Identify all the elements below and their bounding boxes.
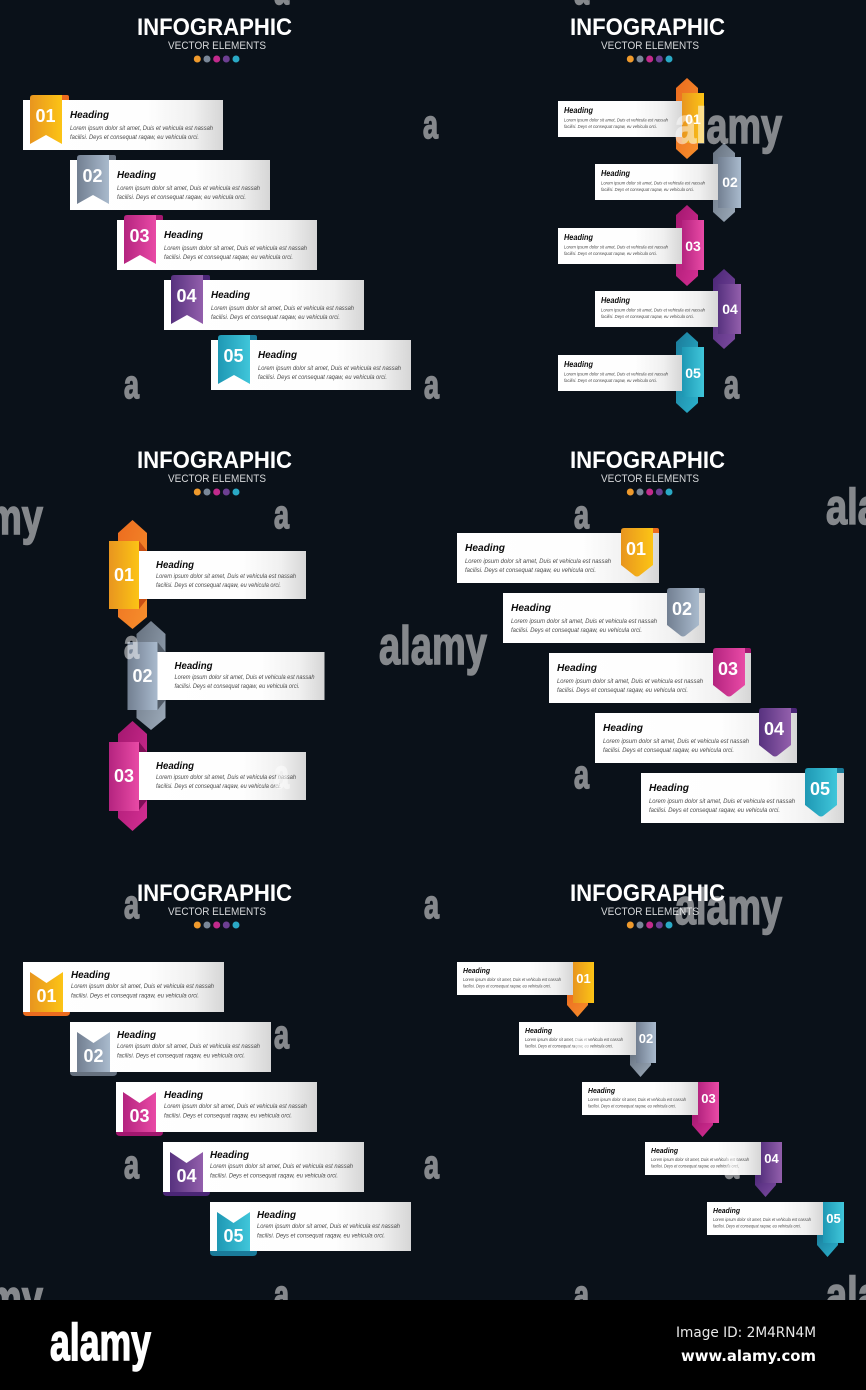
watermark layer: a xyxy=(574,1273,590,1317)
step 02 xyxy=(70,1022,271,1076)
step 05 xyxy=(210,1202,411,1256)
step 01 xyxy=(558,78,704,159)
watermark layer: a xyxy=(124,623,140,667)
title block xyxy=(570,447,725,496)
body text 02: facilisi. Deys et consequat raqaw, eu vehicula orci. xyxy=(117,1052,245,1060)
body text 03: facilisi. Deys et consequat raqaw, eu vehicula orci. xyxy=(557,687,688,694)
body text 01 xyxy=(156,573,297,589)
step 04 xyxy=(595,708,797,763)
panel: hexagon steps top right xyxy=(558,14,741,413)
heading 04: Heading xyxy=(603,722,644,734)
body text 03 xyxy=(557,678,704,694)
number 05: 05 xyxy=(826,1211,841,1226)
body text 04: Lorem ipsum dolor sit amet, Duis et vehicula est nassah xyxy=(601,308,705,312)
icon: banner 02 xyxy=(77,1032,110,1072)
body text 02: Lorem ipsum dolor sit amet, Duis et vehicula est nassah xyxy=(601,180,705,186)
step 02 xyxy=(128,621,324,730)
watermark layer: a xyxy=(274,1013,290,1057)
step 04 xyxy=(645,1142,782,1197)
watermark layer: a xyxy=(274,753,290,797)
icon: tag 02: 02 xyxy=(672,599,692,619)
body text 04 xyxy=(651,1157,749,1168)
step 05 xyxy=(211,335,411,390)
step 04 xyxy=(163,1142,364,1196)
step 01 xyxy=(109,520,306,629)
body text 05: facilisi. Deys et consequat raqaw, eu vehicula orci. xyxy=(713,1224,801,1228)
body text 01: Lorem ipsum dolor sit amet, Duis et vehicula est nassah xyxy=(70,125,214,132)
icon: tag 02 xyxy=(667,588,699,636)
watermark layer: a xyxy=(424,363,440,407)
body text 01: facilisi. Deys et consequat raqaw, eu vehicula orci. xyxy=(71,992,199,1000)
body text 02 xyxy=(117,1043,261,1060)
icon: ribbon 01: 01 xyxy=(35,106,56,126)
heading 04: Heading xyxy=(211,289,251,301)
heading 05: Heading xyxy=(257,1209,297,1221)
title block: INFOGRAPHIC xyxy=(570,880,725,907)
heading 02: Heading xyxy=(117,1029,157,1041)
step 03 xyxy=(116,1082,317,1136)
watermark layer: alamy xyxy=(379,616,487,676)
watermark layer: a xyxy=(274,1273,290,1317)
watermark layer: a xyxy=(574,493,590,537)
heading 01: Heading xyxy=(564,106,593,115)
body text 03 xyxy=(164,245,308,261)
website: www.alamy.com xyxy=(681,1347,816,1365)
body text 03: Lorem ipsum dolor sit amet, Duis et vehicula est nassah xyxy=(164,245,308,252)
body text 04: Lorem ipsum dolor sit amet, Duis et vehicula est nassah xyxy=(211,305,355,312)
icon: tag 03: 03 xyxy=(718,659,738,679)
heading 04: Heading xyxy=(651,1146,678,1155)
footer bar xyxy=(0,1300,866,1390)
icon: banner 05: 05 xyxy=(223,1226,244,1246)
panel: shield tag steps xyxy=(457,447,844,823)
body text 02 xyxy=(525,1037,623,1048)
step 01 xyxy=(457,528,659,583)
number 04: 04 xyxy=(722,301,738,317)
watermark layer: a xyxy=(423,103,439,147)
panel: down arrow steps xyxy=(457,880,844,1257)
body text 05 xyxy=(564,372,668,383)
body text 03 xyxy=(564,244,668,256)
step 05 xyxy=(641,768,844,823)
heading 03: Heading xyxy=(557,662,598,674)
icon: banner 03 xyxy=(123,1092,156,1132)
number 01: 01 xyxy=(685,111,701,127)
body text 02: facilisi. Deys et consequat raqaw, eu vehicula orci. xyxy=(174,683,300,690)
icon: ribbon 02: 02 xyxy=(82,166,103,186)
watermark layer: a xyxy=(124,1143,140,1187)
number 02: 02 xyxy=(722,174,738,190)
watermark layer: alamy xyxy=(675,98,782,154)
body text 05: facilisi. Deys et consequat raqaw, eu vehicula orci. xyxy=(257,1232,385,1240)
icon: tag 04 xyxy=(759,708,791,756)
watermark layer: a xyxy=(574,1013,590,1057)
icon: ribbon 03: 03 xyxy=(129,226,150,246)
step 03 xyxy=(582,1082,719,1137)
body text 05 xyxy=(258,365,402,381)
body text 04 xyxy=(601,308,705,319)
watermark layer: a xyxy=(724,363,740,407)
heading 02: Heading xyxy=(511,602,552,614)
step 02 xyxy=(70,155,270,210)
body text 01: facilisi. Deys et consequat raqaw, eu vehicula orci. xyxy=(156,582,281,589)
icon: banner 04 xyxy=(170,1152,203,1192)
icon: tag 03 xyxy=(713,648,745,696)
icon: tag 05: 05 xyxy=(810,779,830,799)
body text 02: facilisi. Deys et consequat raqaw, eu vehicula orci. xyxy=(525,1044,613,1048)
body text 01 xyxy=(463,977,561,988)
icon: ribbon 04 xyxy=(171,275,203,324)
body text 03: Lorem ipsum dolor sit amet, Duis et vehicula est nassah xyxy=(156,774,297,781)
title block: INFOGRAPHIC xyxy=(137,14,292,41)
step 03 xyxy=(117,215,317,270)
heading 05: Heading xyxy=(258,349,298,361)
title block xyxy=(137,447,292,496)
body text 01: facilisi. Deys et consequat raqaw, eu vehicula orci. xyxy=(463,984,551,988)
heading 01: Heading xyxy=(465,542,506,554)
body text 03: facilisi. Deys et consequat raqaw, eu vehicula orci. xyxy=(164,1112,292,1120)
body text 03: Lorem ipsum dolor sit amet, Duis et vehicula est nassah xyxy=(588,1097,686,1102)
heading 03: Heading xyxy=(164,229,204,241)
panel: three large hexagon steps xyxy=(109,447,324,831)
heading 01: Heading xyxy=(71,969,111,981)
watermark layer: a xyxy=(724,1143,740,1187)
title block: INFOGRAPHIC xyxy=(137,880,292,907)
body text 01 xyxy=(465,558,612,574)
body text 04: Lorem ipsum dolor sit amet, Duis et vehicula est nassah xyxy=(603,738,750,745)
title block xyxy=(570,880,725,928)
number 03: 03 xyxy=(701,1091,716,1106)
body text 02: Lorem ipsum dolor sit amet, Duis et vehicula est nassah xyxy=(117,185,261,192)
icon: tag 01 xyxy=(621,528,653,576)
title block: VECTOR ELEMENTS xyxy=(601,473,699,485)
body text 04: facilisi. Deys et consequat raqaw, eu vehicula orci. xyxy=(603,747,734,754)
number 02: 02 xyxy=(639,1031,653,1046)
heading 01: Heading xyxy=(156,559,195,571)
body text 04: facilisi. Deys et consequat raqaw, eu vehicula orci. xyxy=(601,314,694,319)
body text 02 xyxy=(117,185,261,201)
body text 01 xyxy=(70,125,214,141)
icon: banner 01: 01 xyxy=(36,986,57,1006)
body text 03: facilisi. Deys et consequat raqaw, eu vehicula orci. xyxy=(588,1104,676,1108)
body text 01 xyxy=(564,118,668,129)
heading 02: Heading xyxy=(601,169,630,178)
body text 02: Lorem ipsum dolor sit amet, Duis et vehicula est nassah xyxy=(117,1043,261,1050)
title block xyxy=(137,880,292,928)
icon: ribbon 01 xyxy=(30,95,62,144)
icon: ribbon 03 xyxy=(124,215,156,264)
body text 01: Lorem ipsum dolor sit amet, Duis et vehicula est nassah xyxy=(463,977,561,982)
number 01: 01 xyxy=(114,565,134,585)
body text 02 xyxy=(174,674,315,690)
body text 01 xyxy=(71,983,215,1000)
body text 05: Lorem ipsum dolor sit amet, Duis et vehicula est nassah xyxy=(713,1217,811,1222)
body text 05 xyxy=(713,1217,811,1228)
watermark layer: a xyxy=(424,883,440,927)
step 01 xyxy=(23,95,223,150)
heading 04: Heading xyxy=(601,296,630,305)
heading 01: Heading xyxy=(70,109,110,121)
body text 02 xyxy=(511,618,658,634)
heading 02: Heading xyxy=(174,660,213,672)
number 01: 01 xyxy=(576,971,591,986)
body text 01: Lorem ipsum dolor sit amet, Duis et vehicula est nassah xyxy=(71,983,215,990)
title block xyxy=(570,14,725,62)
step 03 xyxy=(558,205,704,286)
title block: VECTOR ELEMENTS xyxy=(601,40,699,52)
step 05 xyxy=(558,332,704,413)
body text 04: facilisi. Deys et consequat raqaw, eu vehicula orci. xyxy=(210,1172,338,1180)
heading 05: Heading xyxy=(649,782,690,794)
body text 01: facilisi. Deys et consequat raqaw, eu vehicula orci. xyxy=(70,134,199,141)
body text 01: facilisi. Deys et consequat raqaw, eu vehicula orci. xyxy=(465,567,596,574)
body text 03: facilisi. Deys et consequat raqaw, eu vehicula orci. xyxy=(156,783,281,790)
icon: ribbon 04: 04 xyxy=(176,286,197,306)
watermark layer: a xyxy=(574,753,590,797)
panel: ribbon steps top left xyxy=(23,14,411,390)
title block xyxy=(137,14,292,62)
body text 02: facilisi. Deys et consequat raqaw, eu vehicula orci. xyxy=(117,194,246,201)
body text 01: Lorem ipsum dolor sit amet, Duis et vehicula est nassah xyxy=(564,118,668,122)
step 05 xyxy=(707,1202,844,1257)
body text 05: facilisi. Deys et consequat raqaw, eu vehicula orci. xyxy=(649,807,780,814)
title block: INFOGRAPHIC xyxy=(137,447,292,474)
body text 05 xyxy=(649,798,796,814)
body text 02: facilisi. Deys et consequat raqaw, eu vehicula orci. xyxy=(511,627,642,634)
number 03: 03 xyxy=(114,766,134,786)
image id: Image ID: 2M4RN4M xyxy=(676,1325,816,1341)
title block: VECTOR ELEMENTS xyxy=(168,473,266,485)
number 03: 03 xyxy=(685,238,701,254)
body text 05: Lorem ipsum dolor sit amet, Duis et vehicula est nassah xyxy=(649,798,796,805)
number 05: 05 xyxy=(685,365,701,381)
body text 02: Lorem ipsum dolor sit amet, Duis et vehicula est nassah xyxy=(174,674,315,681)
title block: VECTOR ELEMENTS xyxy=(168,906,266,918)
body text 04 xyxy=(603,738,750,754)
heading 04: Heading xyxy=(210,1149,250,1161)
body text 03 xyxy=(588,1097,686,1108)
footer logo: alamy xyxy=(50,1314,151,1372)
body text 02: Lorem ipsum dolor sit amet, Duis et vehicula est nassah xyxy=(511,618,658,625)
title block: INFOGRAPHIC xyxy=(570,14,725,41)
body text 03 xyxy=(156,774,297,790)
body text 05: facilisi. Deys et consequat raqaw, eu vehicula orci. xyxy=(258,374,387,381)
heading 03: Heading xyxy=(156,760,195,772)
body text 03: Lorem ipsum dolor sit amet, Duis et vehicula est nassah xyxy=(564,244,668,250)
title block: VECTOR ELEMENTS xyxy=(168,40,266,52)
title block: VECTOR ELEMENTS xyxy=(601,906,699,918)
heading 03: Heading xyxy=(164,1089,204,1101)
icon: banner 04: 04 xyxy=(176,1166,197,1186)
panel: notched banner steps xyxy=(23,880,411,1256)
step 04 xyxy=(164,275,364,330)
step 02 xyxy=(595,143,741,222)
watermark layer: a xyxy=(274,493,290,537)
body text 03: Lorem ipsum dolor sit amet, Duis et vehicula est nassah xyxy=(557,678,704,685)
body text 03: facilisi. Deys et consequat raqaw, eu vehicula orci. xyxy=(564,251,657,256)
body text 02: Lorem ipsum dolor sit amet, Duis et vehicula est nassah xyxy=(525,1037,623,1042)
icon: banner 03: 03 xyxy=(129,1106,150,1126)
step 03 xyxy=(549,648,751,703)
number 04: 04 xyxy=(764,1151,779,1166)
body text 02 xyxy=(601,180,705,192)
heading 05: Heading xyxy=(564,360,593,369)
body text 05 xyxy=(257,1223,401,1240)
body text 03: facilisi. Deys et consequat raqaw, eu vehicula orci. xyxy=(164,254,293,261)
heading 03: Heading xyxy=(564,233,593,242)
body text 04: Lorem ipsum dolor sit amet, Duis et vehicula est nassah xyxy=(210,1163,354,1170)
watermark layer: a xyxy=(124,883,140,927)
icon: tag 01: 01 xyxy=(626,539,646,559)
heading 02: Heading xyxy=(117,169,157,181)
body text 05: facilisi. Deys et consequat raqaw, eu vehicula orci. xyxy=(564,378,657,383)
step 02 xyxy=(519,1022,656,1077)
body text 04: facilisi. Deys et consequat raqaw, eu vehicula orci. xyxy=(651,1164,739,1168)
body text 05: Lorem ipsum dolor sit amet, Duis et vehicula est nassah xyxy=(257,1223,401,1230)
watermark layer: a xyxy=(124,363,140,407)
body text 05: Lorem ipsum dolor sit amet, Duis et vehicula est nassah xyxy=(258,365,402,372)
icon: tag 04: 04 xyxy=(764,719,784,739)
heading 01: Heading xyxy=(463,966,490,975)
icon: ribbon 05: 05 xyxy=(223,346,244,366)
heading 03: Heading xyxy=(588,1086,615,1095)
step 03 xyxy=(109,721,306,831)
heading 05: Heading xyxy=(713,1206,740,1215)
number 02: 02 xyxy=(132,666,153,686)
body text 05: Lorem ipsum dolor sit amet, Duis et vehicula est nassah xyxy=(564,372,668,376)
icon: banner 02: 02 xyxy=(83,1046,104,1066)
body text 04: facilisi. Deys et consequat raqaw, eu vehicula orci. xyxy=(211,314,340,321)
body text 04 xyxy=(210,1163,354,1180)
body text 01: facilisi. Deys et consequat raqaw, eu vehicula orci. xyxy=(564,124,657,129)
step 04 xyxy=(595,269,741,349)
step 01 xyxy=(457,962,594,1017)
icon: ribbon 05 xyxy=(218,335,250,384)
watermark layer: a xyxy=(424,1143,440,1187)
icon: banner 05 xyxy=(217,1212,250,1251)
icon: ribbon 02 xyxy=(77,155,109,204)
body text 02: facilisi. Deys et consequat raqaw, eu vehicula orci. xyxy=(601,187,694,192)
icon: banner 01 xyxy=(30,972,63,1012)
title block: INFOGRAPHIC xyxy=(570,447,725,474)
step 01 xyxy=(23,962,224,1016)
body text 01: Lorem ipsum dolor sit amet, Duis et vehicula est nassah xyxy=(156,573,297,580)
watermark layer: alamy xyxy=(675,879,782,935)
icon: tag 05 xyxy=(805,768,837,816)
body text 04 xyxy=(211,305,355,321)
body text 03 xyxy=(164,1103,308,1120)
body text 04: Lorem ipsum dolor sit amet, Duis et vehicula est nassah xyxy=(651,1157,749,1162)
heading 02: Heading xyxy=(525,1026,552,1035)
body text 01: Lorem ipsum dolor sit amet, Duis et vehicula est nassah xyxy=(465,558,612,565)
body text 03: Lorem ipsum dolor sit amet, Duis et vehicula est nassah xyxy=(164,1103,308,1110)
step 02 xyxy=(503,588,705,643)
